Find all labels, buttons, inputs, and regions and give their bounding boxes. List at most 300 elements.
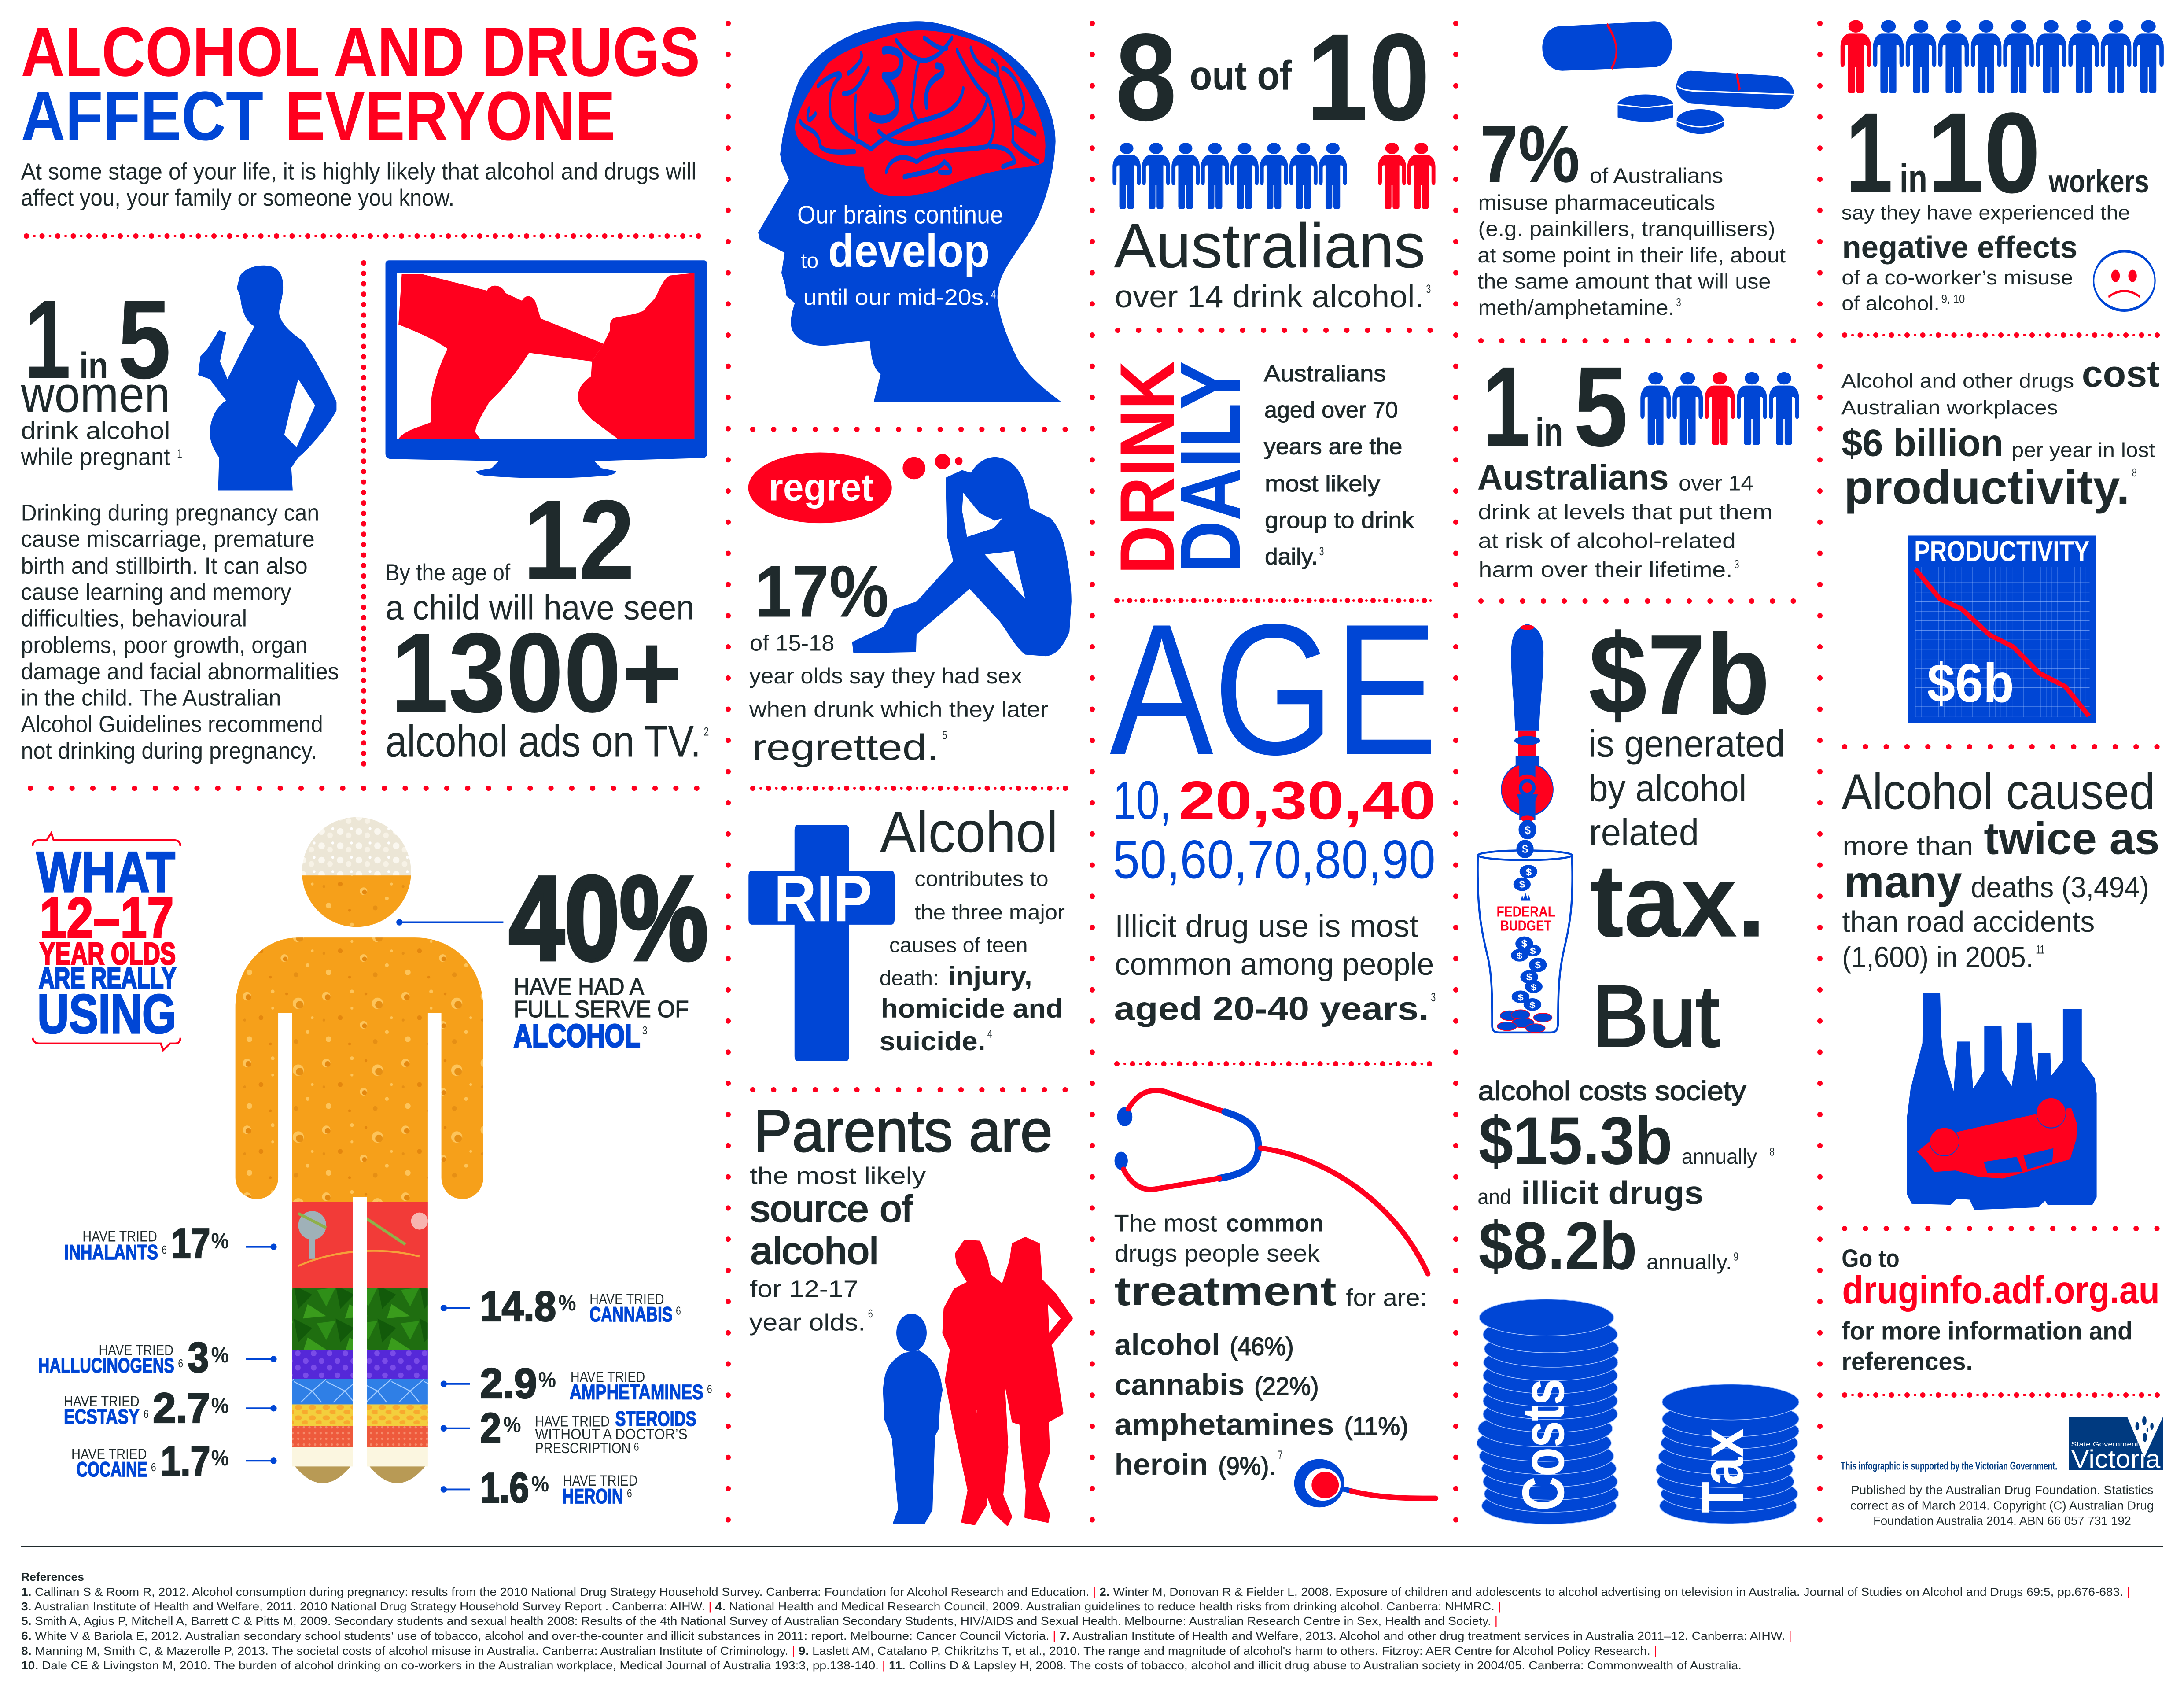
text: parents are the source: the most likely [750,1163,926,1189]
stat: cocaine 1.7%: 6 [151,1461,156,1474]
stat: 8 out of 10: out of [1190,53,1292,99]
icon: costs coin stack [1477,1299,1619,1524]
intro text: At some stage of your life, it is highly likely that alcohol and drugs will [21,159,696,184]
text: costs to society: and [1477,1185,1511,1209]
text: brains develop: to [801,250,818,273]
text: Australians over 14: 3 [1426,282,1431,295]
stat: 1 in 5 women [21,277,182,471]
text: over 70 drink daily: daily. [1265,544,1318,569]
stat: $7b tax: is generated [1588,723,1785,765]
title [21,13,700,155]
body text: pregnancy risks: cause miscarriage, premature [21,526,315,552]
stat: 1 in 5 women: drink alcohol [21,417,170,444]
intro text [21,159,696,211]
text: costs to society: alcohol costs society [1478,1076,1746,1106]
text: tax generated [1588,767,1766,1065]
stat: amphetamines 2.9%: 2.9 [480,1360,537,1407]
title: EVERYONE [285,77,615,155]
panel: references: 1. Callinan S & Room R, 2012. Alcohol consumption during pregnancy: results from the 2010 National Drug Strategy Household Survey. Canberra: Foundation for Alcohol Research and Education. | 2. Winter M, Donovan R & Fielder L, 2008. Exposure of children and adolescents to alcohol advertising on television in Australia. Journal of Studies on Alcohol and Drugs 69:5, pp.676-683. | [21,1585,2130,1598]
stat: inhalants 17%: % [211,1229,229,1253]
labels: Costs and Tax on coin stacks [1510,1379,1756,1513]
callout: speech bubble heading: YEAR OLDS [40,936,176,971]
icon: federal budget glass with coins: $ [1522,843,1528,856]
stat: cocaine 1.7% [71,1438,229,1484]
icon: RIP cross: RIP [774,863,873,936]
text: parents are the source [749,1097,1053,1336]
stat: steroids 2%: HAVE TRIED [535,1413,610,1430]
icon: pregnant woman drinking [198,266,336,491]
text: go to druginfo [1841,1244,2160,1376]
stat: 8 out of 10: 10 [1306,8,1430,147]
stat: 1 in 5 Australians: 5 [1574,343,1628,470]
stat: inhalants 17%: HAVE TRIED [82,1228,157,1245]
stat: 40% full serve of alcohol: HAVE HAD A [514,974,644,1000]
icon: pills [1542,21,1794,134]
text: treatment list: drugs people seek [1115,1240,1320,1267]
panel: references: 6. White V & Bariola E, 2012. Australian secondary school students' use of tobacco, alcohol and over-the-counter and illicit substances in 2011: report. Melbourne: Cancer Council Victoria. | 7. Australian Institute of Health and Welfare, 2013. Alcohol and other drug treatment services in Australia 2011–12. Canberra: AIHW. | [21,1629,1792,1642]
callout: speech bubble heading: ARE REALLY [39,962,176,995]
stat: 8 out of 10 [1115,8,1430,147]
text: publisher credit [1850,1483,2154,1528]
body text: pregnancy risks: cause learning and memory [21,579,291,605]
callout: speech bubble heading: 12–17 [40,886,174,950]
heading: DRINK DAILY rotated: DRINK [1105,361,1190,574]
panel: references: 8. Manning M, Smith C, & Mazerolle P, 2013. The societal costs of alcohol misuse in Australia. Canberra: Australian Institute of Criminology. | 9. Laslett AM, Catalano P, Chikritzhs T, et al., 2010. The range and magnitude of alcohol's harm to others. Fitzroy: AER Centre for Alcohol Policy Research. | [21,1644,1657,1657]
text: illicit drug use: Illicit drug use is most [1115,909,1418,944]
panel: pharmaceuticals, 1 in 5, tax [1477,21,1799,816]
text: costs to society: annually. [1646,1251,1732,1274]
icon: federal budget glass with coins: $ [1526,971,1532,982]
stat: cocaine 1.7%: % [211,1446,229,1470]
icon: boy silhouette [884,1314,942,1523]
stat: 7% misuse pharmaceuticals: (e.g. painkillers, tranquillisers) [1478,218,1775,241]
text: AGE heading: 10, [1113,770,1171,830]
panel: references: 3. Australian Institute of Health and Welfare, 2011. 2010 National Drug Strategy Household Survey Report . Canberra: AIHW. | 4. National Health and Medical Research Council, 2009. Australian guidelines to reduce health risks from drinking alcohol. Canberra: NHMRC. | [21,1600,1501,1613]
text: publisher credit: correct as of March 2014. Copyright (C) Australian Drug [1850,1499,2154,1513]
stat: 1 in 5 Australians: in [1536,410,1563,455]
icon: federal budget glass with coins: $ [1519,879,1525,890]
icon: sad face [2094,251,2155,310]
stat: hallucinogens 3%: 3 [188,1334,209,1381]
stat: 1 in 5 Australians: over 14 [1679,472,1753,495]
text: illicit drug use: common among people [1115,947,1434,982]
title: AFFECT [21,77,263,155]
text: treatment list: The most [1114,1210,1217,1236]
text: over 70 drink daily [1264,361,1414,569]
icon: ten workers [1841,20,2164,93]
logo: State Government Victoria: Victoria [2071,1445,2161,1473]
text: go to druginfo: Go to [1841,1244,1900,1273]
text: alcohol caused deaths: twice as [1984,813,2160,864]
text: treatment list: (9%). [1218,1452,1275,1480]
stat: 7% misuse pharmaceuticals: the same amount that will use [1477,270,1771,294]
heading: DRINK DAILY rotated: DAILY [1163,361,1258,573]
stat: 40% full serve of alcohol: FULL SERVE OF [514,996,689,1022]
icon: bottles and overturned car [1907,993,2097,1210]
text: over 70 drink daily: most likely [1265,471,1381,497]
icon: federal budget glass with coins: $ [1535,959,1541,970]
stat: 40% full serve of alcohol: 40% [509,851,708,985]
stat: 7% misuse pharmaceuticals: 7% [1480,109,1580,199]
text: alcohol caused deaths: Alcohol caused [1841,763,2155,820]
stat: ecstasy 2.7%: HAVE TRIED [64,1393,140,1410]
callout: speech bubble heading [33,833,180,1050]
stat: 1 in 5 women: 1 [177,447,182,460]
text: over 70 drink daily: Australians [1264,361,1386,387]
stat: heroin 1.6%: HEROIN [563,1484,623,1508]
icon: federal budget glass with coins: BUDGET [1500,917,1551,934]
text: treatment list: (11%) [1344,1412,1408,1441]
stat: ecstasy 2.7% [64,1385,229,1432]
stat: 1 in 5 Australians: 3 [1734,558,1739,571]
text: cost to workplaces: Australian workplaces [1841,396,2058,419]
text: costs to society [1477,1076,1775,1284]
icon: federal budget glass with coins: $ [1517,993,1524,1002]
stat: hallucinogens 3%: % [211,1343,229,1367]
stat: heroin 1.6%: 6 [627,1487,632,1500]
chart: productivity decline: $6b [1927,652,2014,713]
icon: ten people [1112,143,1436,209]
stat: amphetamines 2.9%: AMPHETAMINES [570,1380,703,1404]
text: illicit drug use [1114,909,1436,1028]
chart: productivity decline: PRODUCTIVITY [1914,535,2090,567]
text: treatment list: common [1226,1210,1323,1236]
icon: tap neck [1517,794,1538,822]
text: over 70 drink daily: years are the [1264,434,1402,459]
text: alcohol and teen death: Alcohol [880,800,1058,865]
panel: title, pregnancy and TV ads [21,13,709,766]
stat: hallucinogens 3% [38,1334,229,1381]
body text: pregnancy risks [21,500,339,764]
text: over 70 drink daily: aged over 70 [1264,397,1398,423]
text: go to druginfo: druginfo.adf.org.au [1842,1268,2160,1312]
text: treatment list [1114,1210,1427,1482]
stat: 1300 alcohol ads by age 12: a child will have seen [386,588,694,627]
labels: Costs and Tax on coin stacks: Costs [1510,1379,1576,1511]
stat: hallucinogens 3%: 6 [178,1358,183,1370]
stat: 1 in 10 workers: workers [2048,163,2149,199]
logo: State Government Victoria: State Government [2071,1440,2139,1448]
stat: inhalants 17%: INHALANTS [64,1240,158,1264]
text: AGE heading: 20,30,40 [1179,770,1436,830]
stat: 7% misuse pharmaceuticals: at some point in their life, about [1477,244,1786,267]
icon: federal budget glass with coins [1478,820,1573,1033]
stat: 1 in 10 workers: 10 [1927,89,2040,217]
text: cost to workplaces: 8 [2132,466,2137,479]
body text: pregnancy risks: birth and stillbirth. It can also [21,553,308,579]
body text: pregnancy risks: not drinking during pregnancy. [21,738,317,764]
stat: inhalants 17%: 17 [172,1220,210,1267]
icon: regret thought bubble: regret [769,466,873,509]
stat: 1300 alcohol ads by age 12: 2 [704,725,709,738]
stat: 1 in 10 workers: of alcohol. [1841,292,1940,315]
stat: amphetamines 2.9%: HAVE TRIED [571,1369,645,1386]
stat: 1 in 10 workers: negative effects [1842,230,2077,265]
stat: 1 in 10 workers: of a co-worker’s misuse [1841,266,2073,289]
stat: cannabis 14.8%: CANNABIS [589,1302,673,1326]
stat: 1 in 5 women: in [79,345,108,386]
stat: amphetamines 2.9% [480,1360,712,1407]
stat: 8 out of 10: 8 [1115,8,1177,147]
stat: 1 in 5 women: while pregnant [21,443,170,471]
title: ALCOHOL AND DRUGS [21,13,700,91]
stat: 1 in 5 Australians: harm over their lifetime. [1479,558,1732,582]
stat: 40% full serve of alcohol: ALCOHOL [514,1018,641,1054]
text: cost to workplaces: per year in lost [2012,439,2155,461]
text: alcohol and teen death: homicide and [880,994,1063,1024]
stat: cannabis 14.8%: 14.8 [480,1283,556,1330]
panel: what 12-17 year olds are using [33,815,712,1511]
text: alcohol caused deaths: more than [1842,831,1973,861]
icon: beer tap handle [1501,624,1553,816]
text: AGE heading: AGE [1110,585,1438,794]
stat: 7% misuse pharmaceuticals: 3 [1676,296,1681,309]
stat: ecstasy 2.7%: 2.7 [153,1385,210,1432]
logo: State Government Victoria [2069,1416,2163,1473]
stat: 1 in 10 workers: say they have experienced the [1841,201,2130,224]
text: brains develop: develop [828,225,990,277]
panel: references: References [21,1570,84,1583]
stat: 17% regretted: when drunk which they later [749,697,1048,722]
text: AGE heading [1110,585,1438,890]
panel: 8 out of 10 and drink daily [1112,8,1436,569]
text: alcohol and teen death: causes of teen [889,934,1028,957]
icon: federal budget glass with coins: $ [1517,952,1523,961]
icon: tax coin stack [1656,1384,1799,1524]
text: treatment list: cannabis [1115,1369,1245,1402]
text: cost to workplaces: cost [2082,354,2160,395]
text: illicit drug use: aged 20-40 years. [1114,991,1429,1028]
stat: cannabis 14.8%: HAVE TRIED [589,1291,664,1308]
text: cost to workplaces [1841,354,2160,514]
stat: steroids 2%: % [503,1413,521,1437]
stat: 17% regretted: of 15-18 [750,631,834,656]
text: alcohol and teen death: 4 [987,1028,992,1041]
stat: 1 in 5 Australians: 1 [1482,343,1530,470]
stat: heroin 1.6%: HAVE TRIED [563,1472,637,1489]
stat: heroin 1.6%: 1.6 [480,1465,529,1511]
text: alcohol caused deaths: many [1844,857,1962,908]
stat: steroids 2%: STEROIDS [615,1407,696,1430]
icon: RIP cross [748,825,895,1061]
text: costs to society: illicit drugs [1521,1174,1703,1211]
stat: steroids 2%: WITHOUT A DOCTOR’S [535,1426,688,1443]
stat: 1 in 5 women: 5 [118,277,171,402]
stat: 7% misuse pharmaceuticals: misuse pharmaceuticals [1478,191,1715,215]
text: cost to workplaces: productivity. [1844,461,2130,514]
text: parents are the source: alcohol [750,1231,878,1272]
icon: parents silhouette [943,1238,1072,1525]
stat: 1300 alcohol ads by age 12: alcohol ads on TV. [386,716,701,766]
stat: 1 in 10 workers [1841,89,2149,315]
stat: $7b tax [1588,611,1785,765]
text: costs to society: annually [1682,1145,1757,1169]
stat: 1 in 5 women: women [21,367,170,423]
icon: person with head in hands [852,457,1072,656]
text: brains develop: until our mid-20s. [803,285,991,310]
callout: speech bubble heading: USING [37,983,176,1045]
text: alcohol and teen death: suicide. [880,1026,986,1056]
panel: references: 5. Smith A, Agius P, Mitchell A, Barrett C & Pitts M, 2009. Secondary students and sexual health 2008: Results of the 4th National Survey of Australian Secondary Students, HIV/AIDS and Sexual Health. Melbourne: Australian Research Centre in Sex, Health and Society. | [21,1614,1498,1627]
icon: regret thought bubble [748,452,962,523]
panel: teen deaths and parents [748,800,1072,1525]
text: parents are the source: 6 [868,1308,873,1320]
text: alcohol caused deaths: 11 [2036,944,2045,956]
stat: hallucinogens 3%: HAVE TRIED [99,1342,173,1359]
icon: head silhouette with brain [758,21,1062,402]
text: cost to workplaces: $6 billion [1841,422,2004,464]
stat: steroids 2%: 2 [480,1405,501,1451]
body text: pregnancy risks: damage and facial abnormalities [21,658,339,684]
text: costs to society: 8 [1770,1146,1775,1159]
text: costs to society: $8.2b [1479,1208,1637,1284]
text: tax generated: related [1589,812,1699,853]
stat: steroids 2% [480,1405,696,1457]
text: tax generated: tax. [1590,842,1766,959]
text: brains develop: Our brains continue [797,201,1003,229]
stat: inhalants 17% [64,1220,229,1267]
stat: 17% regretted: regretted. [752,727,939,767]
text: AGE heading: 50,60,70,80,90 [1113,829,1436,890]
stat: steroids 2%: PRESCRIPTION [535,1440,630,1457]
text: over 70 drink daily: 3 [1319,545,1324,558]
stat: cocaine 1.7%: HAVE TRIED [71,1446,147,1463]
stat: 17% regretted: 17% [755,550,889,632]
icon: federal budget glass with coins: $ [1529,1001,1536,1010]
icon: federal budget glass with coins: $ [1526,867,1532,878]
text: treatment list: amphetamines [1115,1408,1334,1442]
panel: references [21,1546,2163,1672]
stat: 1300 alcohol ads by age 12: 12 [523,477,635,603]
icon: federal budget glass with coins: $ [1530,947,1536,956]
stat: 1 in 5 Australians: at risk of alcohol-related [1478,530,1736,553]
stat: inhalants 17%: 6 [162,1244,167,1256]
stat: $7b tax: $7b [1588,611,1770,738]
text: treatment list: (22%) [1254,1373,1319,1401]
body text: pregnancy risks: difficulties, behavioural [21,605,247,631]
stat: 1 in 10 workers: in [1900,156,1927,201]
text: illicit drug use: 3 [1431,991,1436,1004]
panel: road deaths, links and publisher [1841,763,2163,1528]
text: alcohol caused deaths: than road accidents [1842,906,2095,939]
text: brains develop [797,201,1003,310]
text: alcohol caused deaths: deaths (3,494) [1971,871,2149,904]
text: parents are the source: for 12-17 [750,1276,858,1303]
text: treatment list: (46%) [1230,1332,1294,1361]
text: supported by Victorian Government: This infographic is supported by the Victorian Government. [1841,1460,2057,1472]
intro text: affect you, your family or someone you know. [21,184,454,211]
icon: federal budget glass with coins: $ [1531,983,1537,992]
stat: 40% full serve of alcohol [509,851,708,1054]
stat: heroin 1.6% [480,1465,637,1511]
text: treatment list: treatment [1115,1269,1337,1314]
stat: cocaine 1.7%: COCAINE [77,1457,147,1481]
text: alcohol and teen death: death: [880,967,939,990]
text: alcohol and teen death [880,800,1065,1056]
stat: heroin 1.6%: % [531,1472,549,1496]
icon: television with drinking silhouette [386,260,707,478]
panel: age and treatment [1110,585,1438,1507]
stat: cannabis 14.8%: % [558,1291,576,1315]
panel: brain and regret [748,21,1072,767]
text: parents are the source: source of [750,1188,913,1230]
panel: tax glass and costs [1477,767,1799,1524]
icon: stethoscope [1115,1090,1436,1507]
text: go to druginfo: references. [1841,1347,1973,1376]
text: publisher credit: Foundation Australia 2014. ABN 66 057 731 192 [1873,1514,2131,1528]
stat: cannabis 14.8% [480,1283,681,1330]
text: Australians over 14: over 14 drink alcohol. [1115,279,1424,314]
stat: 17% regretted: 5 [943,729,947,742]
connector lines [246,920,503,1492]
figure: person filled with beer and drug bands [236,815,483,1488]
stat: 1300 alcohol ads by age 12 [386,477,709,766]
text: Australians over 14 [1114,211,1431,314]
stat: hallucinogens 3%: HALLUCINOGENS [38,1353,174,1377]
stat: steroids 2%: 6 [634,1441,639,1454]
stat: 40% full serve of alcohol: 3 [642,1025,648,1037]
text: publisher credit: Published by the Australian Drug Foundation. Statistics [1851,1483,2153,1497]
text: tax generated: by alcohol [1588,767,1746,809]
stat: amphetamines 2.9%: % [538,1368,556,1392]
text: costs to society: $15.3b [1479,1103,1672,1178]
text: brains develop: 4 [991,288,996,301]
body text: pregnancy risks: in the child. The Australian [21,685,281,711]
text: alcohol caused deaths: (1,600) in 2005. [1842,941,2033,974]
stat: 1 in 10 workers: 1 [1845,89,1893,217]
stat: 1300 alcohol ads by age 12: By the age of [386,559,511,585]
stat: 17% regretted [749,550,1048,767]
text: alcohol and teen death: the three major [914,900,1065,924]
text: alcohol and teen death: injury, [948,962,1032,991]
heading: DRINK DAILY rotated [1105,361,1258,574]
panel: workers and productivity [1841,20,2164,723]
text: cost to workplaces: Alcohol and other drugs [1841,369,2074,392]
callout: speech bubble heading: WHAT [37,841,175,904]
stat: 1 in 5 women: 1 [24,277,71,402]
text: Australians over 14: Australians [1114,211,1425,281]
text: costs to society: 9 [1734,1251,1738,1263]
text: go to druginfo: for more information and [1841,1317,2132,1345]
stat: ecstasy 2.7%: % [211,1393,229,1418]
stat: 1 in 5 Australians [1477,343,1772,582]
text: over 70 drink daily: group to drink [1265,508,1414,533]
text: alcohol and teen death: contributes to [914,867,1049,891]
icon: federal budget glass with coins: $ [1525,824,1531,837]
stat: 7% misuse pharmaceuticals: meth/amphetamine. [1478,296,1675,320]
stat: cocaine 1.7%: 1.7 [161,1438,210,1484]
text: parents are the source: Parents are [754,1097,1053,1164]
icon: five people [1640,372,1799,445]
text: alcohol caused deaths [1841,763,2160,974]
stat: ecstasy 2.7%: 6 [144,1408,149,1421]
stat: 1300 alcohol ads by age 12: 1300+ [390,610,682,736]
stat: 1 in 10 workers: 9, 10 [1941,293,1965,306]
stat: 1 in 5 Australians: drink at levels that put them [1478,501,1772,524]
panel: references: 10. Dale CE & Livingston M, 2010. The burden of alcohol drinking on co-workers in the Australian workplace, Medical Journal of Australia 193:3, pp.138-140. | 11. Collins D & Lapsley H, 2008. The costs of tobacco, alcohol and illicit drug abuse to Australian society in 2004/05. Canberra: Commonwealth of Australia. [21,1659,1742,1672]
body text: pregnancy risks: Drinking during pregnancy can [21,500,319,526]
text: tax generated: But [1592,968,1720,1065]
chart: productivity decline [1908,535,2096,723]
text: parents are the source: year olds. [749,1310,865,1336]
stat: 17% regretted: year olds say they had sex [749,664,1022,688]
icon: federal budget glass with coins: $ [1521,938,1528,949]
body text: pregnancy risks: Alcohol Guidelines recommend [21,711,323,737]
stat: ecstasy 2.7%: ECSTASY [64,1404,140,1428]
text: treatment list: 7 [1278,1449,1283,1462]
stat: cannabis 14.8%: 6 [676,1305,681,1317]
labels: Costs and Tax on coin stacks: Tax [1689,1428,1756,1513]
